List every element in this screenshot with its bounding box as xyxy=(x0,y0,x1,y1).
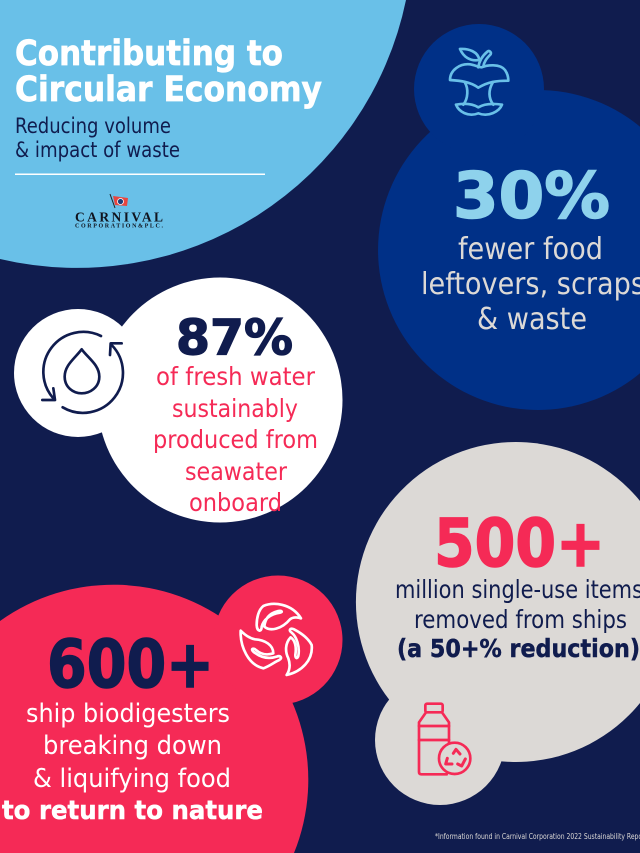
text: fresh water description: produced from xyxy=(153,425,318,454)
text: fresh water description xyxy=(153,362,318,517)
text: food waste description: & waste xyxy=(477,302,587,337)
panel: biodigesters xyxy=(0,576,342,853)
panel: single-use items xyxy=(356,442,640,805)
text: fresh water description: onboard xyxy=(189,488,282,517)
panel: fresh water xyxy=(14,278,342,522)
text: fresh water description: seawater xyxy=(185,457,288,486)
stat: 30%: 30% xyxy=(453,160,610,232)
subtitle: & impact of waste xyxy=(15,138,180,162)
text: fresh water description: of fresh water xyxy=(156,362,316,391)
icon: recycling leaves xyxy=(241,604,312,675)
stat: 87%: 87% xyxy=(176,310,293,366)
logo: Carnival Corporation xyxy=(75,194,164,230)
text: biodigesters description: to return to nature xyxy=(2,796,263,826)
text: biodigesters description: & liquifying food xyxy=(33,764,231,794)
logo: Carnival Corporation: CARNIVAL xyxy=(75,210,163,224)
panel: header xyxy=(0,0,406,268)
text: food waste description xyxy=(421,232,640,337)
subtitle: Reducing volume xyxy=(15,114,171,138)
title xyxy=(15,34,322,110)
text: biodigesters description: breaking down xyxy=(43,731,222,761)
text: single-use description xyxy=(395,575,640,663)
title: Circular Economy xyxy=(15,70,322,110)
icon: apple core xyxy=(450,49,508,115)
text: biodigesters description xyxy=(2,699,263,826)
subtitle xyxy=(15,114,180,162)
logo: Carnival Corporation: CORPORATION&PLC. xyxy=(75,224,164,230)
stat: 600+: 600+ xyxy=(47,626,214,703)
text: biodigesters description: ship biodigesters xyxy=(26,699,230,729)
text: fresh water description: sustainably xyxy=(172,394,298,423)
title: Contributing to xyxy=(15,34,283,74)
panel: food waste xyxy=(378,24,640,410)
icon: water drop cycle xyxy=(42,332,123,413)
icon: recyclable bottle xyxy=(419,704,470,774)
text: food waste description: fewer food xyxy=(458,232,603,267)
stat: 500+: 500+ xyxy=(434,505,605,582)
